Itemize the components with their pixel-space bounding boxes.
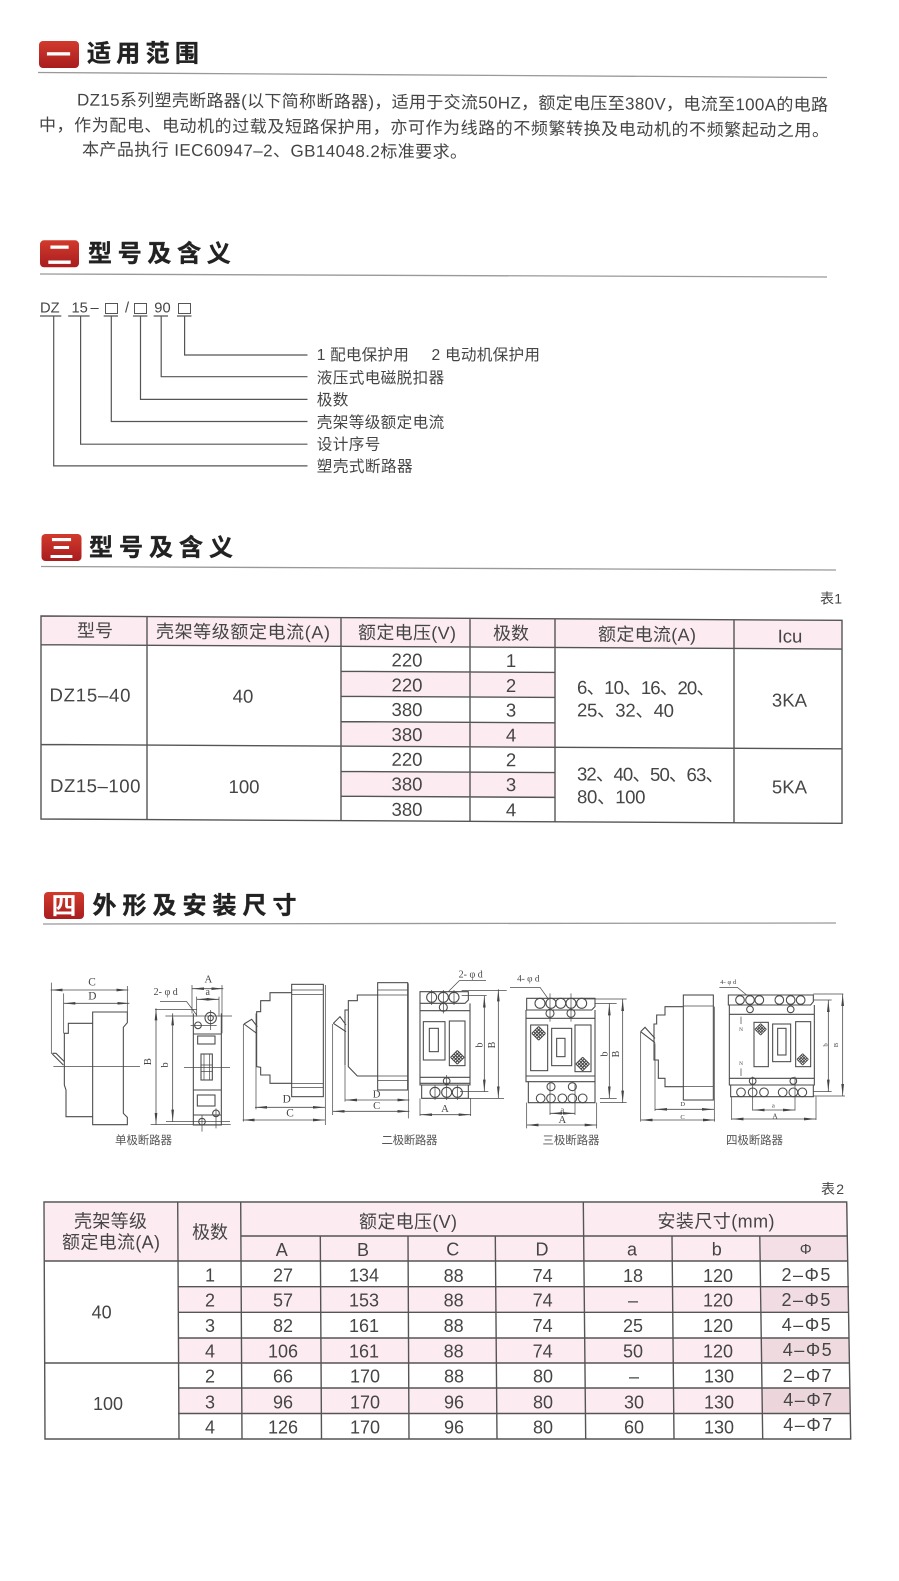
table 1 DZ15-40 group: 380 (391, 724, 423, 745)
table 2 data rows: 96 (444, 1392, 464, 1412)
intro text block: 中，作为配电、电动机的过载及短路保护用，亦可作为线路的不频繁转换及电动机的不频繁起动之用。 (39, 116, 829, 140)
four pole front view: A (772, 1111, 778, 1120)
table 2 header: a (627, 1240, 638, 1260)
code meanings: 1 配电保护用 (317, 346, 409, 364)
single pole side view (51, 976, 140, 1125)
drawing captions: 单极断路器 (115, 1133, 172, 1147)
table 2 data rows: 74 (533, 1342, 553, 1362)
table 1 grid (41, 616, 842, 823)
table 2 data rows: 82 (273, 1316, 293, 1336)
table 1 DZ15-100 group: 100 (228, 776, 260, 797)
model code: DZ (40, 300, 60, 316)
three pole front view: A (558, 1115, 566, 1126)
section 2 heading (40, 240, 827, 277)
code meanings: 2 电动机保护用 (432, 346, 540, 364)
table 1 DZ15-100 group: 380 (391, 773, 423, 795)
table 1 header (77, 621, 802, 647)
code meanings (317, 346, 540, 475)
table 2 header: A (276, 1240, 288, 1260)
table 2 fills (45, 1203, 850, 1413)
table 2 data rows: 2–Φ5 (781, 1265, 832, 1285)
table 1 DZ15-100 group (50, 747, 808, 822)
table 1 DZ15-40 group: DZ15–40 (50, 684, 130, 706)
table 2 data rows: 106 (268, 1341, 298, 1361)
drawing captions (115, 1133, 784, 1147)
table 2 header: D (536, 1240, 548, 1260)
table 1 DZ15-100 group: 220 (391, 749, 423, 770)
table 1 header: 额定电压(V) (358, 623, 456, 643)
rule 1 (38, 72, 827, 78)
table 1 (41, 616, 842, 823)
table 2 data rows: 27 (273, 1266, 293, 1286)
drawing captions: 二极断路器 (382, 1133, 438, 1147)
table 2 frame current labels: 100 (93, 1394, 123, 1414)
section 4 heading (43, 892, 836, 924)
table 2 data rows: 4 (205, 1341, 215, 1361)
table 2 data rows: 57 (273, 1291, 293, 1311)
table 2 data rows: – (628, 1291, 638, 1311)
two pole side view: D (373, 1089, 381, 1100)
table 2 header: b (712, 1240, 722, 1260)
title 2: 型号及含义 (88, 240, 236, 268)
table 1 DZ15-40 group: 4 (506, 725, 516, 746)
table 2 data rows: 170 (350, 1367, 380, 1387)
table 2 frame current labels: 40 (92, 1303, 112, 1323)
badge 3 (42, 534, 82, 563)
table 2 data rows: 134 (349, 1266, 379, 1286)
table 1 DZ15-40 group (50, 648, 808, 747)
table 1 DZ15-40 group: 1 (506, 650, 516, 671)
table 2 data rows: 120 (703, 1342, 733, 1362)
two pole front view: B (487, 1041, 498, 1048)
code meanings: 液压式电磁脱扣器 (317, 369, 445, 387)
table 2 data rows: 130 (704, 1392, 734, 1412)
single pole front view: B (143, 1058, 154, 1065)
three pole front view: 4- φ d (517, 974, 540, 984)
table 1 DZ15-40 group: 3 (506, 700, 516, 721)
table 1 DZ15-40 group: 220 (391, 674, 423, 696)
table 1 DZ15-100 group: DZ15–100 (50, 775, 140, 796)
table 2 data rows: 161 (349, 1316, 379, 1336)
table 2 data rows: 161 (349, 1341, 379, 1361)
table 1 header: Icu (778, 625, 802, 647)
table 1 header: 额定电流(A) (598, 625, 696, 645)
table 2 data rows: 2–Φ7 (783, 1366, 833, 1386)
drawing captions: 三极断路器 (542, 1133, 600, 1147)
two pole front view: 2- φ d (459, 969, 483, 980)
two pole side view (333, 983, 409, 1118)
four pole front view: b (822, 1043, 829, 1047)
table 2 data rows: – (629, 1367, 639, 1387)
table 1 DZ15-40 group: 2 (506, 675, 516, 696)
table 1 DZ15-100 group: 4 (506, 799, 516, 820)
table 2 data rows: 4–Φ5 (783, 1340, 833, 1360)
code meanings: 极数 (317, 391, 349, 409)
four pole side view (641, 995, 715, 1122)
table 1 DZ15-100 group: 2 (506, 749, 516, 770)
table 2 data rows: 96 (273, 1392, 293, 1412)
table 2 data rows: 88 (444, 1367, 464, 1387)
title 1: 适用范围 (87, 40, 204, 68)
table 2 header: Φ (800, 1241, 812, 1258)
table 1 header: 壳架等级额定电流(A) (156, 622, 330, 643)
second side view: C (286, 1107, 294, 1119)
table 1 DZ15-40 group: 380 (391, 699, 423, 720)
table 2 data rows: 80 (533, 1367, 553, 1387)
second side view: D (283, 1093, 291, 1105)
table 2 frame current labels (92, 1303, 123, 1414)
rule 4 (43, 923, 836, 924)
title 3: 型号及含义 (89, 534, 239, 562)
table 2 data rows: 2 (205, 1291, 215, 1311)
table 2 data rows: 3 (205, 1316, 215, 1336)
table 2 data rows (205, 1265, 834, 1438)
table 2 data rows: 4–Φ7 (783, 1415, 834, 1435)
table 2 data rows: 120 (703, 1316, 733, 1336)
table 2 grid (44, 1202, 851, 1439)
single pole front view (143, 974, 232, 1132)
table 2 data rows: 130 (704, 1418, 734, 1438)
rule 3 (41, 566, 836, 570)
drawing captions: 四极断路器 (726, 1133, 784, 1147)
two pole front view (420, 969, 507, 1116)
model code diagram (40, 300, 540, 475)
table 1 header: 极数 (493, 623, 529, 644)
model code (40, 300, 190, 316)
table 2 header (62, 1212, 812, 1260)
table 2 data rows: 120 (703, 1266, 733, 1286)
single pole front view: b (160, 1062, 171, 1068)
section 3 heading (41, 534, 836, 570)
four pole front view: N (739, 1027, 743, 1033)
table 2 header: C (446, 1240, 459, 1260)
table 2 data rows: 25 (623, 1316, 643, 1336)
table 1 DZ15-100 group: 32、40、50、63、 (577, 763, 724, 785)
single pole front view: A (204, 974, 212, 985)
table 2 header: B (357, 1240, 369, 1260)
intro text block (39, 90, 829, 164)
single pole front view: 2- φ d (154, 987, 178, 998)
table 2 data rows: 66 (273, 1367, 293, 1387)
model code: – (90, 300, 100, 316)
rule 2 (40, 274, 827, 277)
table 2 header: 额定电流(A) (62, 1233, 160, 1253)
table 2 data rows: 88 (444, 1316, 464, 1336)
title 4: 外形及安装尺寸 (92, 892, 302, 920)
table 2 data rows: 4 (205, 1418, 215, 1438)
badge 1 (39, 41, 79, 70)
table 1 DZ15-40 group: 220 (391, 649, 423, 671)
four pole front view: B (833, 1042, 840, 1047)
single pole side view: D (88, 991, 96, 1003)
table 1 fills (41, 616, 842, 799)
table 2 (44, 1202, 851, 1439)
single pole side view: C (88, 976, 96, 988)
table 1 header: 型号 (77, 621, 113, 641)
model code: 90 (154, 300, 171, 316)
model code: / (125, 300, 130, 316)
model code: 15 (72, 300, 88, 316)
table 2 data rows: 2–Φ5 (781, 1290, 832, 1310)
code meanings: 设计序号 (317, 436, 380, 454)
four pole front view: a (772, 1102, 775, 1109)
two pole front view: A (441, 1104, 449, 1115)
table 2 data rows: 80 (533, 1418, 553, 1438)
two pole side view: C (373, 1101, 380, 1112)
table 2 data rows: 80 (533, 1392, 553, 1412)
intro text block: DZ15系列塑壳断路器(以下简称断路器)，适用于交流50HZ，额定电压至380V，电流至100A的电路 (77, 91, 828, 115)
code meanings: 壳架等级额定电流 (317, 413, 445, 431)
dimension drawings right (420, 969, 845, 1128)
dimension drawings left (51, 974, 409, 1132)
table 2 data rows: 88 (444, 1342, 464, 1362)
table 2 data rows: 1 (205, 1266, 215, 1286)
three pole front view: b (599, 1051, 610, 1056)
three pole front view: a (560, 1104, 564, 1114)
table 2 data rows: 153 (349, 1291, 379, 1311)
table 1 DZ15-40 group: 6、10、16、20、 (577, 677, 715, 698)
table 2 data rows: 3 (205, 1392, 215, 1412)
table 1 DZ15-100 group: 3 (506, 774, 516, 795)
badge 2: 二 (47, 242, 72, 270)
two pole front view: b (474, 1042, 485, 1047)
badge 4: 四 (51, 892, 77, 920)
table 2 data rows: 4–Φ7 (783, 1390, 834, 1410)
three pole front view: B (611, 1050, 622, 1057)
table 2 header: 极数 (192, 1223, 228, 1243)
table 2 data rows: 126 (268, 1418, 298, 1438)
badge 4 (44, 892, 84, 920)
table 1 DZ15-40 group: 3KA (772, 689, 808, 711)
table 2 data rows: 130 (704, 1367, 734, 1387)
table 2 header: 壳架等级 (74, 1212, 147, 1232)
badge 2 (40, 240, 79, 270)
table 2 data rows: 2 (205, 1367, 215, 1387)
table 2 data rows: 170 (350, 1418, 380, 1438)
three pole front view (510, 974, 627, 1128)
second side view (243, 984, 325, 1125)
badge 1: 一 (46, 42, 71, 70)
table 2 data rows: 50 (623, 1342, 643, 1362)
table 2 data rows: 88 (444, 1266, 464, 1286)
four pole side view: D (680, 1101, 685, 1108)
table 2 data rows: 88 (444, 1291, 464, 1311)
four pole front view: N (739, 1061, 743, 1067)
table 2 data rows: 74 (533, 1266, 553, 1286)
table 2 data rows: 96 (444, 1418, 464, 1438)
table 1 DZ15-100 group: 380 (391, 799, 423, 820)
single pole front view: a (205, 987, 210, 998)
table 2 data rows: 60 (624, 1418, 644, 1438)
section 1 heading (38, 40, 827, 78)
four pole front view (719, 979, 845, 1120)
leader lines (40, 316, 308, 466)
badge 3: 三 (49, 535, 74, 563)
table 2 data rows: 170 (350, 1392, 380, 1412)
intro text block: 本产品执行 IEC60947–2、GB14048.2标准要求。 (82, 140, 467, 162)
code meanings: 塑壳式断路器 (317, 457, 413, 475)
four pole side view: C (680, 1114, 685, 1121)
table 2 header: 额定电压(V) (359, 1212, 457, 1232)
table 1 DZ15-100 group: 80、100 (577, 786, 646, 807)
table 2 caption: 表2 (821, 1181, 844, 1197)
table 2 data rows: 18 (623, 1266, 643, 1286)
table 2 data rows: 120 (703, 1291, 733, 1311)
table 2 data rows: 4–Φ5 (782, 1315, 832, 1335)
table 2 header: 安装尺寸(mm) (658, 1212, 774, 1232)
table 1 DZ15-40 group: 40 (233, 686, 253, 707)
table 2 data rows: 74 (533, 1291, 553, 1311)
four pole front view: 4- φ d (720, 979, 737, 986)
table 1 DZ15-40 group: 25、32、40 (577, 699, 674, 721)
table 2 data rows: 30 (624, 1392, 644, 1412)
table 1 caption: 表1 (820, 590, 842, 606)
table 1 DZ15-100 group: 5KA (772, 776, 808, 797)
table 2 data rows: 74 (533, 1316, 553, 1336)
